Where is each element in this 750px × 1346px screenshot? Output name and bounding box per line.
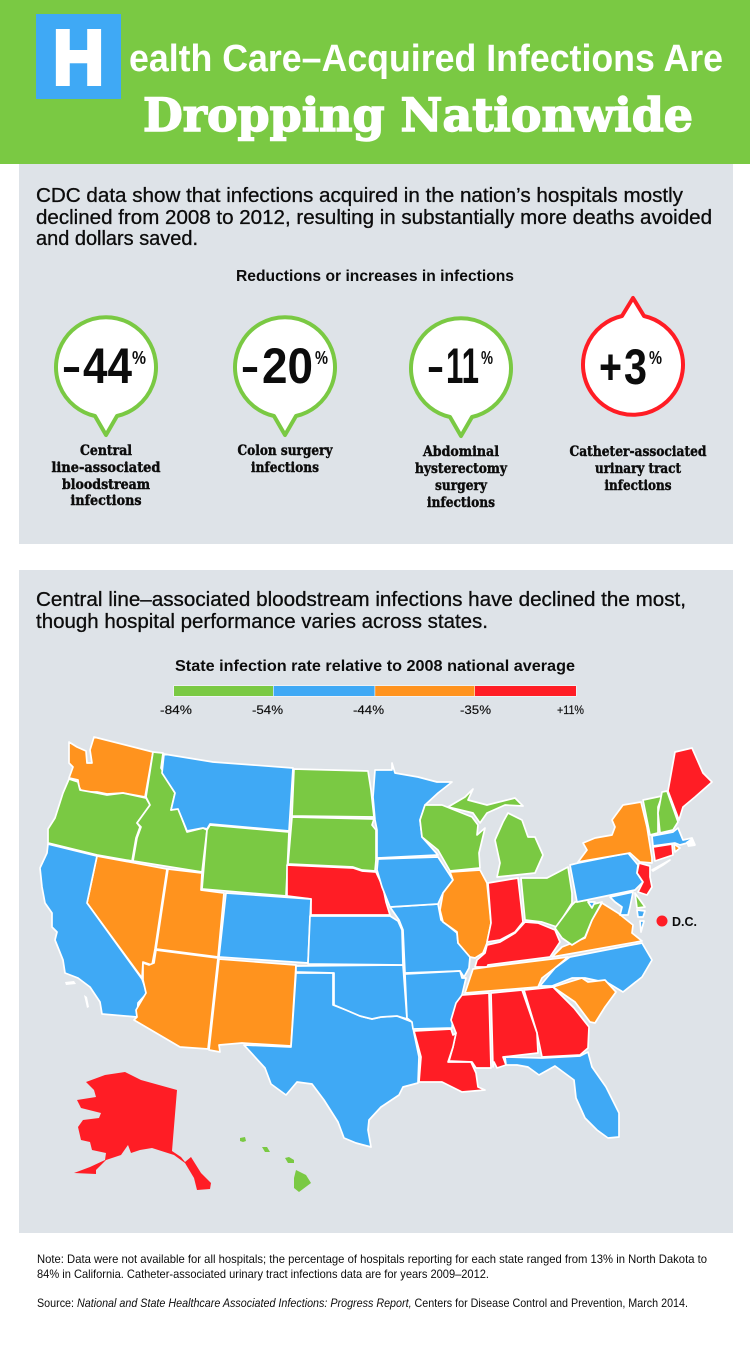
stat: central line -44%: % bbox=[132, 348, 146, 368]
stat: colon surgery -20%: % bbox=[315, 348, 328, 368]
intro paragraph bbox=[36, 185, 712, 250]
stat: abdominal hysterectomy -11%: infections bbox=[427, 495, 495, 511]
intro paragraph: declined from 2008 to 2012, resulting in substantially more deaths avoided bbox=[36, 207, 712, 229]
icon: H initial block: H bbox=[53, 15, 104, 101]
stat: abdominal hysterectomy -11% bbox=[411, 318, 511, 511]
intro paragraph: CDC data show that infections acquired in the nation’s hospitals mostly bbox=[36, 185, 683, 207]
stat: catheter-associated +3% bbox=[570, 298, 707, 494]
intro paragraph: and dollars saved. bbox=[36, 228, 198, 250]
map of US states bbox=[40, 737, 712, 1192]
stat: central line -44% bbox=[52, 317, 161, 509]
legend scale: -84% bbox=[160, 703, 192, 717]
footnote bbox=[37, 1252, 707, 1281]
stat: central line -44%: infections bbox=[70, 493, 142, 509]
map intro paragraph bbox=[36, 589, 686, 633]
stat: catheter-associated +3%: Catheter-associated bbox=[570, 444, 707, 460]
stat: abdominal hysterectomy -11%: hysterectomy bbox=[415, 461, 508, 477]
icon: H initial block bbox=[36, 14, 121, 101]
D.C. marker bbox=[656, 914, 697, 929]
stat: catheter-associated +3%: infections bbox=[604, 478, 672, 494]
stat: central line -44%: line-associated bbox=[52, 460, 161, 476]
panel: infection reductions bbox=[19, 164, 733, 544]
legend scale: +11% bbox=[557, 703, 584, 717]
stat: abdominal hysterectomy -11%: surgery bbox=[435, 478, 488, 494]
subheading: Reductions or increases in infections bbox=[236, 268, 514, 285]
footnote: 84% in California. Catheter-associated urinary tract infections data are for years 2009–2012. bbox=[37, 1267, 489, 1281]
stat: colon surgery -20%: Colon surgery bbox=[238, 443, 333, 459]
D.C. marker: D.C. bbox=[672, 914, 697, 929]
legend title: State infection rate relative to 2008 national average bbox=[175, 658, 575, 675]
legend scale bbox=[160, 686, 584, 717]
stat: central line -44%: bloodstream bbox=[62, 477, 150, 493]
map intro paragraph: though hospital performance varies across states. bbox=[36, 611, 488, 633]
legend scale: -44% bbox=[353, 703, 384, 717]
header banner bbox=[0, 0, 750, 164]
map intro paragraph: Central line–associated bloodstream infections have declined the most, bbox=[36, 589, 686, 611]
stat: colon surgery -20%: infections bbox=[251, 460, 319, 476]
title line 2: Dropping Nationwide bbox=[143, 88, 693, 142]
stat: abdominal hysterectomy -11%: % bbox=[481, 348, 493, 368]
stat: catheter-associated +3%: % bbox=[649, 348, 662, 368]
stat: abdominal hysterectomy -11%: Abdominal bbox=[422, 444, 499, 460]
stat: catheter-associated +3%: + bbox=[599, 339, 622, 395]
stat: central line -44%: Central bbox=[80, 443, 132, 459]
legend scale: -54% bbox=[252, 703, 283, 717]
stat: catheter-associated +3%: urinary tract bbox=[595, 461, 681, 477]
title line 1: ealth Care–Acquired Infections Are bbox=[129, 38, 723, 80]
stat: central line -44%: 44 bbox=[83, 338, 132, 394]
footnote: Note: Data were not available for all hospitals; the percentage of hospitals reporting for each state ranged from 13% in North Dakota to bbox=[37, 1252, 707, 1266]
legend scale: -35% bbox=[460, 703, 491, 717]
stat: abdominal hysterectomy -11%: 11 bbox=[446, 338, 479, 394]
panel: state map bbox=[19, 570, 733, 1233]
stat: central line -44%: – bbox=[63, 338, 80, 394]
stat: colon surgery -20%: 20 bbox=[262, 338, 313, 394]
source: Source: National and State Healthcare Associated Infections: Progress Report, Centers for Disease Control and Prevention, March 2014. bbox=[37, 1296, 688, 1310]
stat: catheter-associated +3%: 3 bbox=[624, 339, 647, 395]
stat: abdominal hysterectomy -11%: – bbox=[428, 338, 443, 394]
stat: colon surgery -20%: – bbox=[242, 338, 258, 394]
stat: colon surgery -20% bbox=[235, 317, 335, 476]
